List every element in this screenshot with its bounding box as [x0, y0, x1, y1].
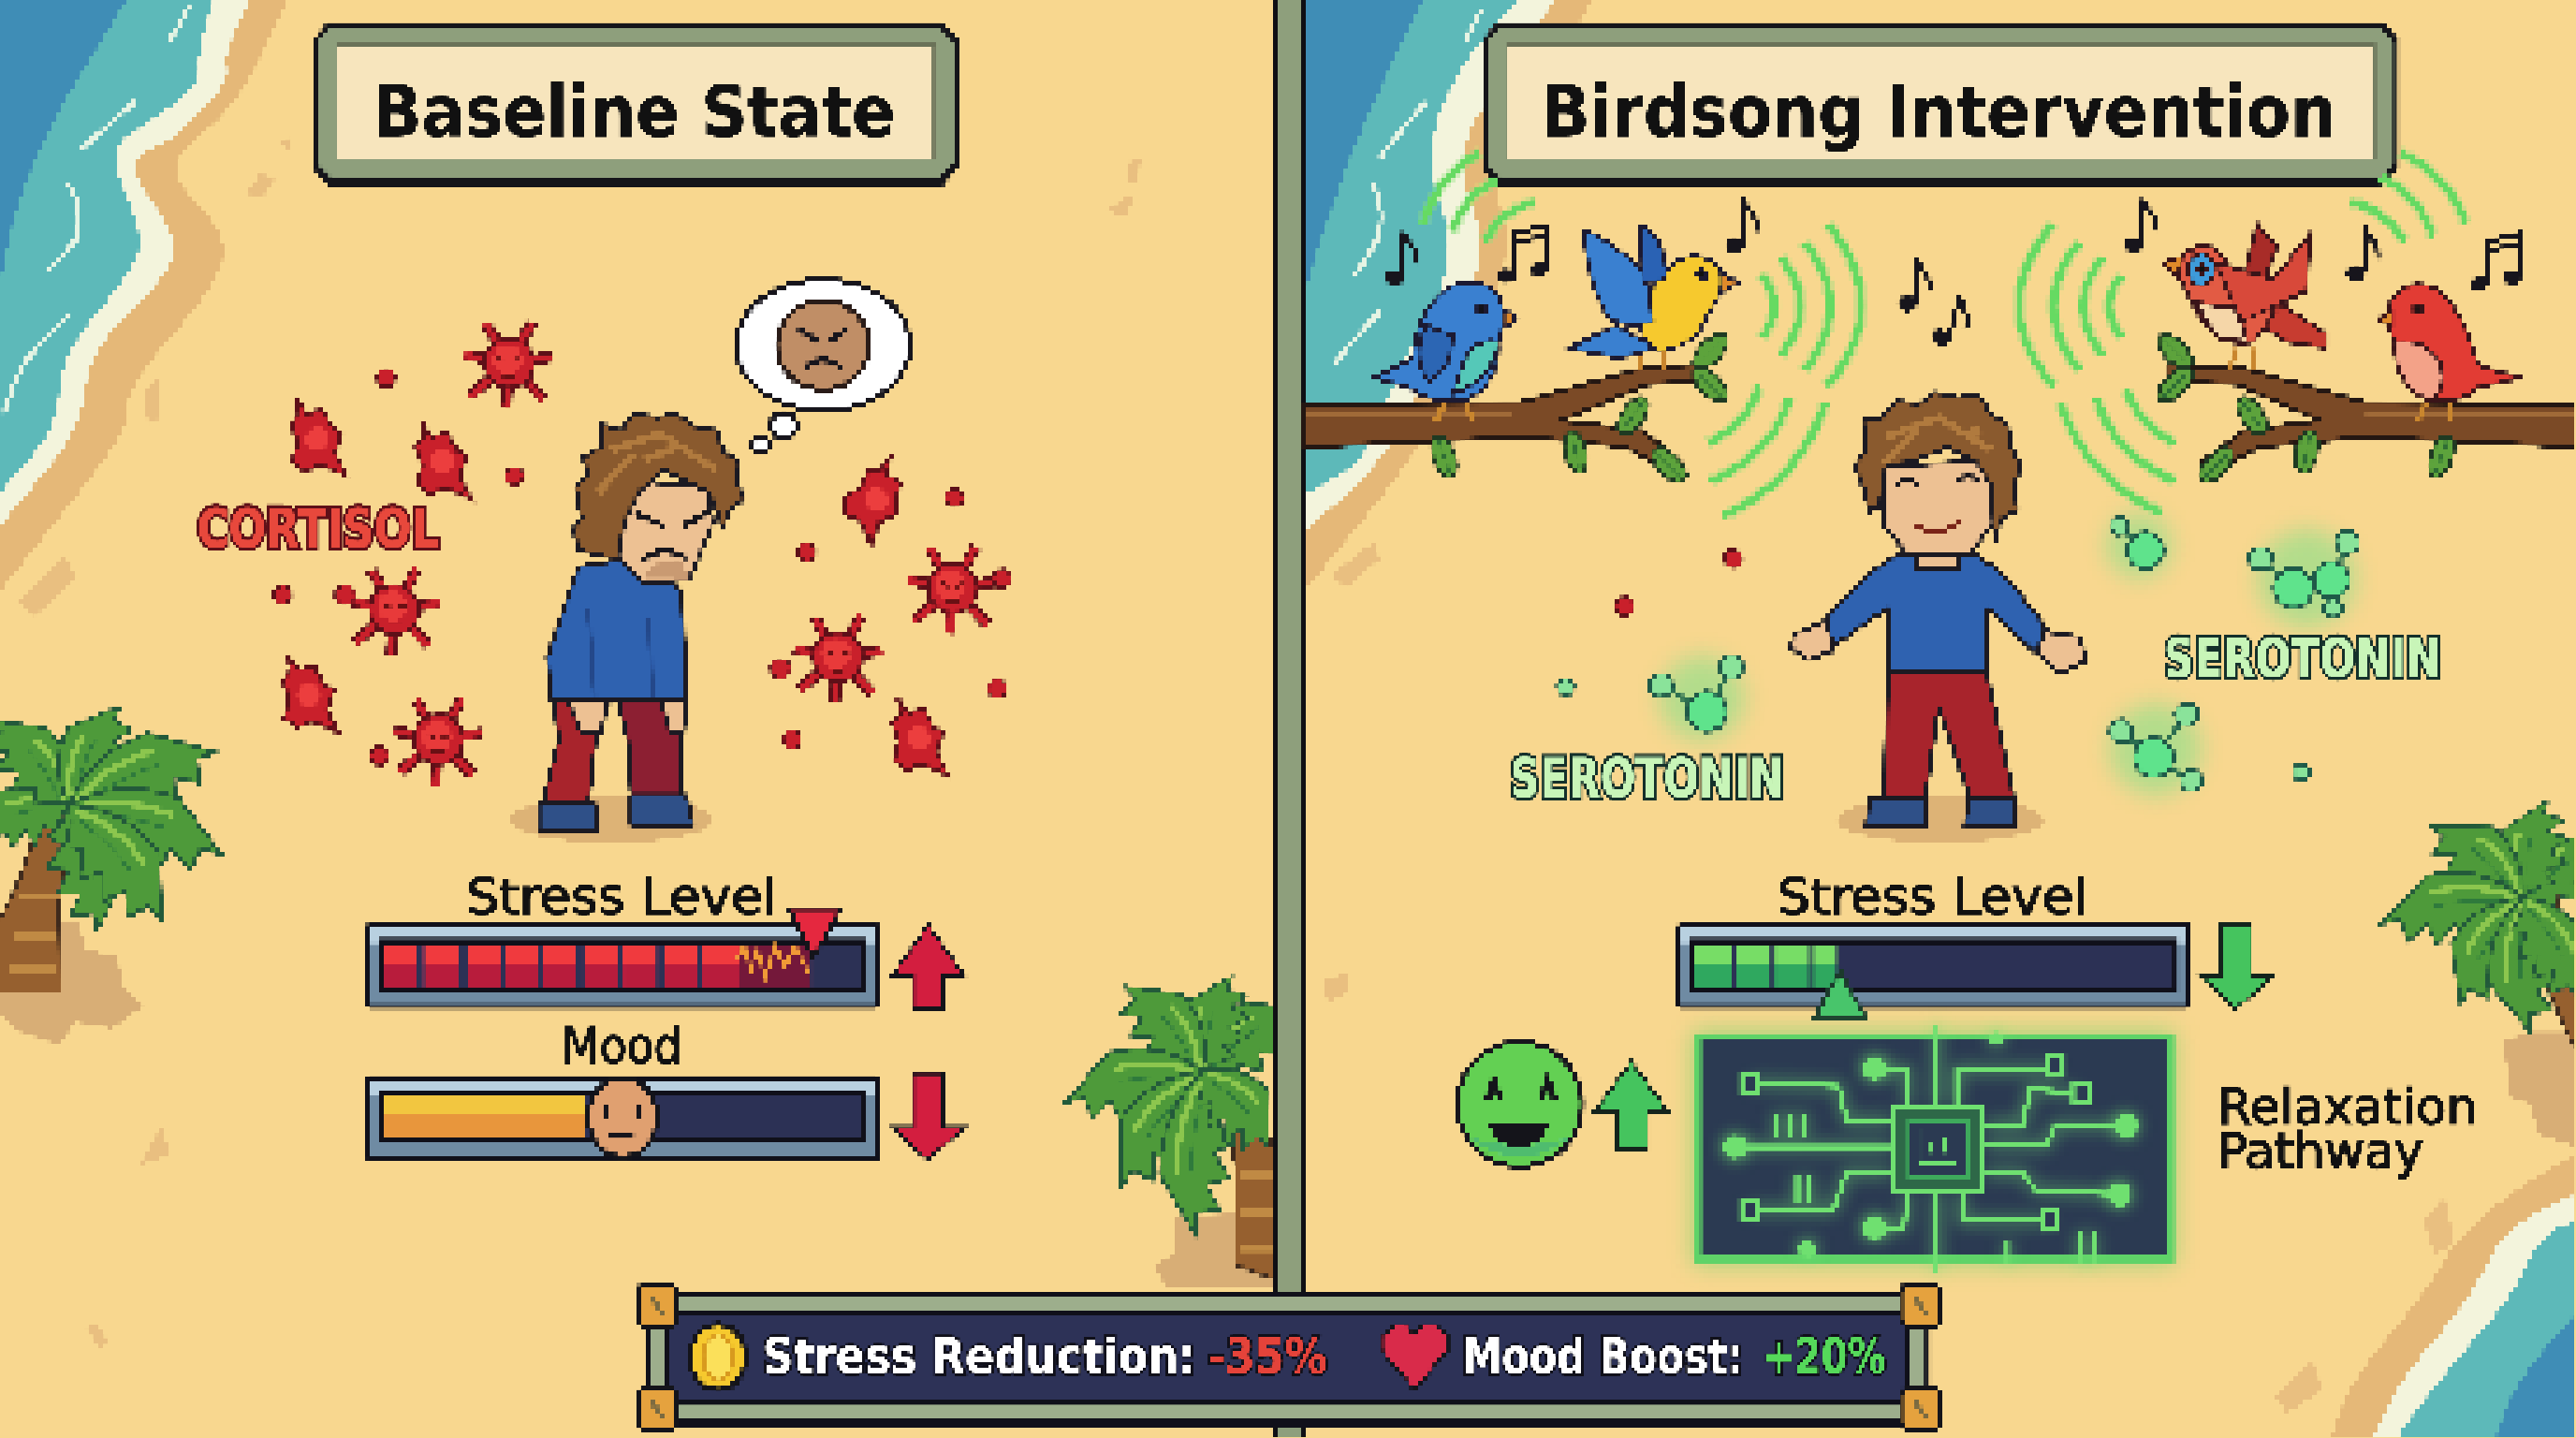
cortisol particles [273, 322, 1011, 785]
palm tree: right [2378, 796, 2576, 1147]
label: mood: Mood [562, 1019, 681, 1076]
bird: yellow with blue wings [1567, 225, 1738, 372]
thought bubble with angry face [736, 279, 910, 453]
label: relaxation pathway: Relaxation [2217, 1078, 2478, 1136]
branches [1305, 365, 2576, 473]
stat: mood boost: Mood Boost: [1462, 1328, 1743, 1386]
character: relaxed person [1791, 392, 2086, 843]
character: stressed person [509, 414, 744, 843]
label: serotonin left: SEROTONIN [1510, 746, 1784, 810]
water: top-right shoreline [1305, 0, 1592, 592]
bird: red perched [2378, 285, 2520, 420]
serotonin molecules [1558, 513, 2359, 795]
leaves [1427, 329, 2459, 488]
label: stress level intervention: Stress Level [1778, 869, 2088, 926]
panel: bottom summary bar [637, 1284, 1940, 1430]
stat: stress reduction: Stress Reduction: [762, 1328, 1196, 1386]
icon: happy green face [1457, 1042, 1582, 1167]
icon: heart [1382, 1325, 1447, 1390]
stress level bar: intervention [1676, 923, 2191, 1009]
bird: blue [1373, 283, 1518, 420]
icon: gold coin [690, 1325, 746, 1390]
arrow: stress up [892, 925, 964, 1009]
palm tree: center [1061, 961, 1316, 1286]
mood bar: baseline [365, 1075, 881, 1160]
stress level bar: baseline [365, 923, 881, 1009]
panel: relaxation pathway circuit board [1692, 1025, 2175, 1271]
arrow: mood up [1595, 1062, 1667, 1149]
label: serotonin right: SEROTONIN [2163, 626, 2441, 690]
sound waves [1423, 153, 2466, 516]
center divider [1273, 0, 1305, 1438]
panel: Birdsong Intervention title frame [1482, 22, 2398, 185]
label: relaxation pathway: Pathway [2217, 1123, 2423, 1181]
panel: Baseline State title frame [312, 22, 959, 185]
stat: mood boost: +20% [1763, 1328, 1886, 1386]
label: stress level baseline: Stress Level [466, 869, 777, 926]
arrow: mood down [892, 1073, 964, 1160]
heading: Birdsong Intervention: Birdsong Intervention [1541, 71, 2336, 154]
label: cortisol: CORTISOL [198, 496, 439, 560]
heading: Baseline State: Baseline State [373, 71, 896, 154]
palm tree: left [0, 691, 233, 1045]
stat: stress reduction: -35% [1208, 1328, 1327, 1386]
arrow: stress down [2200, 925, 2274, 1009]
marker: stress level high [788, 909, 842, 958]
water: top-left shoreline [0, 0, 287, 592]
bird: red flapping [2162, 224, 2326, 372]
marker: stress level low [1814, 971, 1866, 1019]
music notes [1385, 198, 2521, 351]
water: bottom-right shoreline [2331, 1153, 2576, 1438]
